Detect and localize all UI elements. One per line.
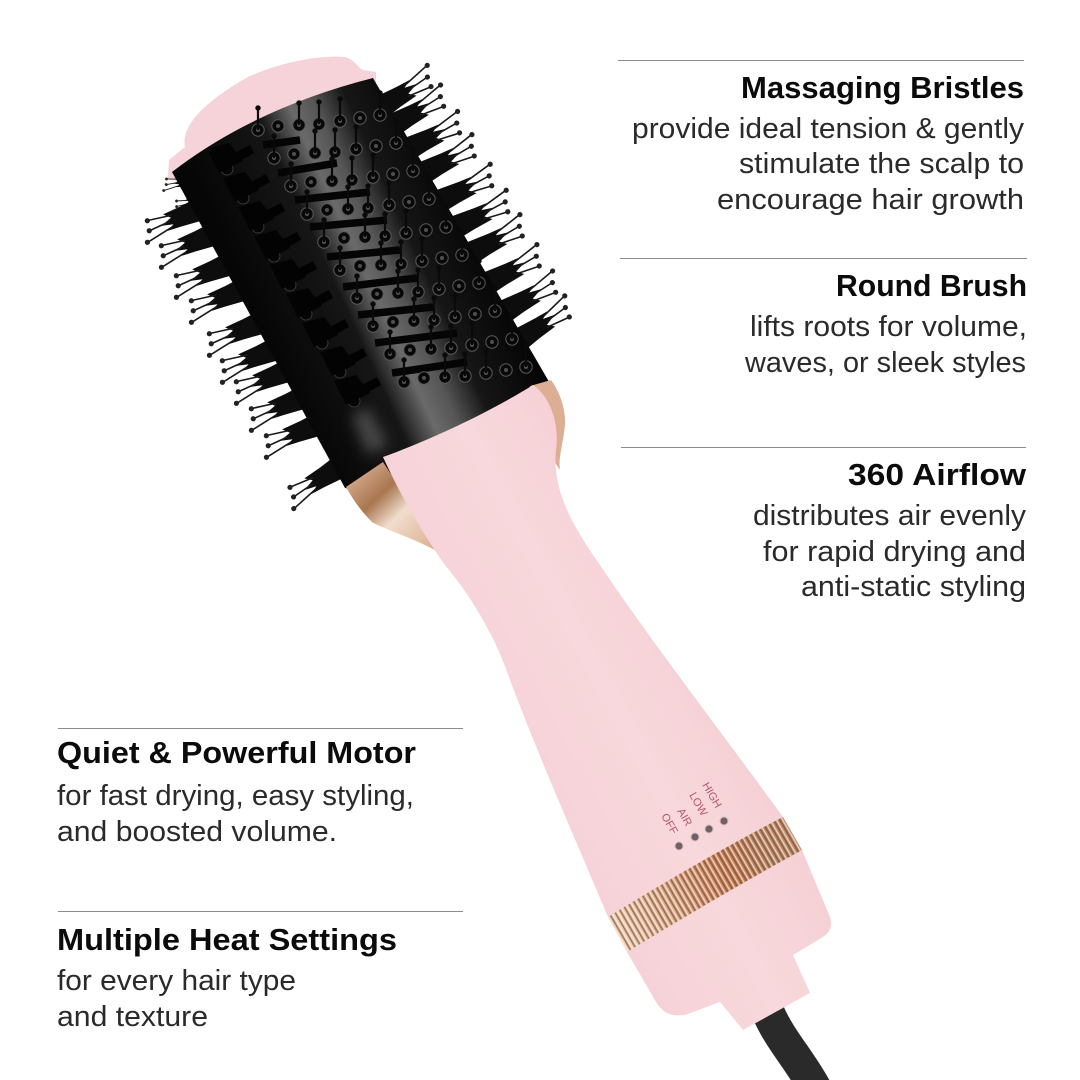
control labels: AIR [674,806,694,828]
feature: Round Brush: waves, or sleek styles [744,347,1026,379]
rose gold ribbed band [608,817,802,952]
feature: 360 Airflow: anti-static styling [801,571,1026,603]
feature: Massaging Bristles: encourage hair growth [717,184,1024,216]
feature: Round Brush [620,258,1027,379]
power cord [768,1012,816,1080]
feature: Quiet & Powerful Motor: Quiet & Powerful Motor [57,735,416,770]
inner bristle column [207,143,379,407]
rose gold trim right [530,380,565,470]
rose gold trim left [346,462,445,556]
feature: 360 Airflow: distributes air evenly [753,500,1027,532]
feature: Massaging Bristles: Massaging Bristles [741,70,1024,105]
indicator lights [675,817,728,850]
feature: 360 Airflow: 360 Airflow [848,457,1027,492]
control labels: LOW [686,790,710,819]
bar slots on barrel [263,140,467,373]
lower barrel gleam [352,408,388,455]
feature: Massaging Bristles: provide ideal tension & gently [632,113,1025,145]
right bristle tufts [371,62,580,351]
feature: Round Brush: Round Brush [836,268,1027,303]
control labels: HIGH [699,780,724,810]
feature: Round Brush: lifts roots for volume, [750,311,1027,343]
feature: Quiet & Powerful Motor: and boosted volume. [57,816,337,848]
pink handle [383,385,831,1030]
feature: Multiple Heat Settings: and texture [57,1001,208,1033]
feature: 360 Airflow: for rapid drying and [763,536,1026,568]
product: pink hair dryer brush [136,57,831,1080]
feature: Multiple Heat Settings: Multiple Heat Settings [57,922,397,957]
row of pin bristles [252,90,532,388]
feature: Massaging Bristles: stimulate the scalp to [739,148,1024,180]
control labels: OFF [658,812,680,837]
feature: Multiple Heat Settings: for every hair type [57,965,296,997]
black barrel [172,78,560,500]
feature: Quiet & Powerful Motor: for fast drying, easy styling, [57,780,414,812]
feature: Quiet & Powerful Motor [57,728,463,848]
feature: Massaging Bristles [618,60,1025,216]
left bristle tufts [136,173,350,512]
brush end cap [168,57,376,182]
feature: Multiple Heat Settings [57,912,463,1033]
feature: 360 Airflow [621,448,1027,603]
control labels [658,780,724,837]
